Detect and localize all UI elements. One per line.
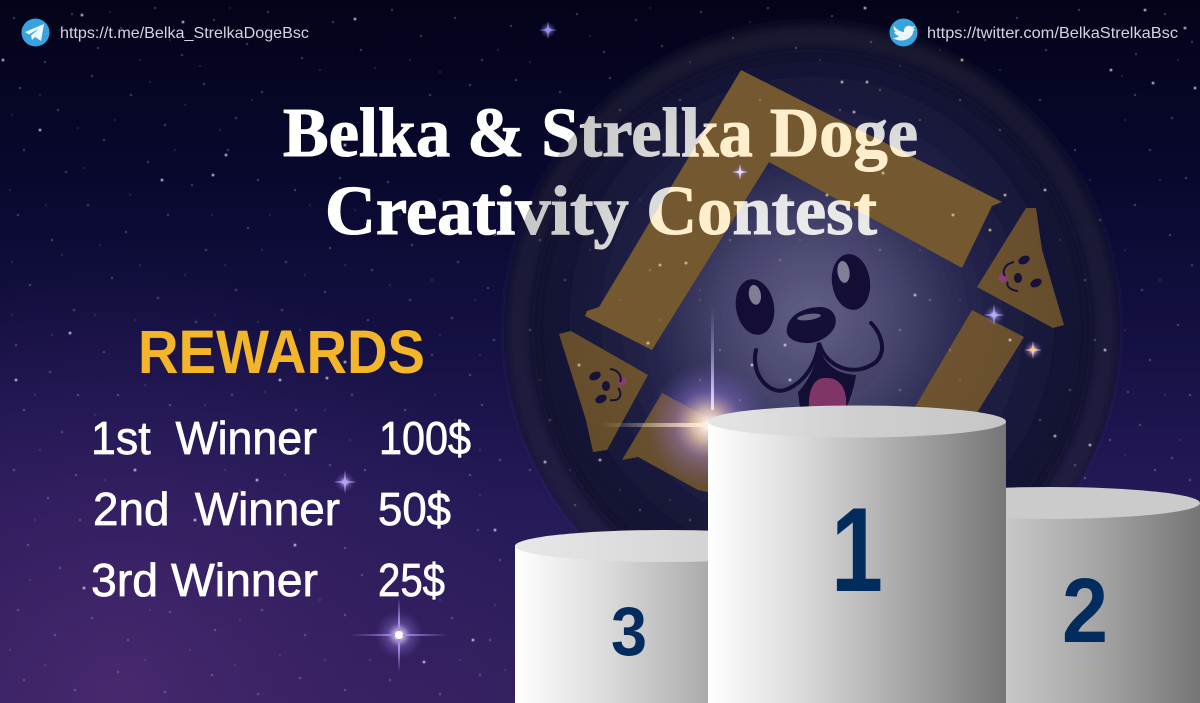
- third winner: 25$: [378, 554, 445, 606]
- number 3: 3: [611, 593, 647, 670]
- planet disc with dark ring: [506, 24, 1118, 636]
- podium 1: [708, 406, 1006, 703]
- telegram link: https://t.me/Belka_StrelkaDogeBsc: [60, 25, 309, 42]
- dog face: [731, 252, 882, 408]
- right eye: [828, 252, 874, 312]
- sparkle: near second winner: [333, 470, 357, 494]
- smile line: [755, 323, 882, 391]
- number 1: 1: [831, 483, 883, 617]
- first winner: 100$: [379, 412, 471, 464]
- tongue: [809, 378, 846, 408]
- podium 2: [900, 487, 1200, 703]
- mouth interior: [798, 350, 856, 408]
- sparkle: bottom big: [350, 598, 448, 672]
- sparkle stars: [333, 21, 1042, 672]
- lens flare behind podium: [600, 305, 770, 487]
- first winner: [91, 412, 471, 464]
- icon: telegram: [22, 18, 50, 46]
- cheek shading: [756, 348, 882, 402]
- telegram link: [22, 18, 309, 46]
- first winner: 1st Winner: [91, 412, 317, 464]
- second winner: 50$: [378, 483, 451, 535]
- podium 3: [515, 530, 815, 703]
- nose: [787, 307, 836, 343]
- twitter link: https://twitter.com/BelkaStrelkaBsc: [927, 25, 1178, 42]
- sparkle: logo top: [732, 164, 748, 180]
- logo: brown diamond chevrons: [559, 70, 1064, 492]
- second winner: 2nd Winner: [93, 483, 340, 535]
- sparkle: top blue: [539, 21, 557, 39]
- third winner: [91, 554, 445, 606]
- rewards heading: REWARDS: [138, 318, 425, 386]
- sparkle: logo orange: [1024, 341, 1042, 359]
- small dog face right: [998, 254, 1043, 291]
- number 2: 2: [1062, 560, 1108, 662]
- third winner: 3rd Winner: [91, 554, 318, 606]
- tint layer: logo and disc dim the title: [504, 22, 1120, 638]
- twitter link: [890, 18, 1178, 46]
- icon: twitter: [890, 18, 918, 46]
- rewards table: [91, 412, 471, 606]
- title: Creativity Contest: [325, 173, 877, 250]
- small dog face left: [588, 369, 626, 405]
- title: [283, 95, 918, 250]
- left eye: [731, 276, 779, 338]
- second winner: [93, 483, 451, 535]
- sparkle: logo blue: [983, 304, 1005, 326]
- title: Belka & Strelka Doge: [283, 95, 918, 172]
